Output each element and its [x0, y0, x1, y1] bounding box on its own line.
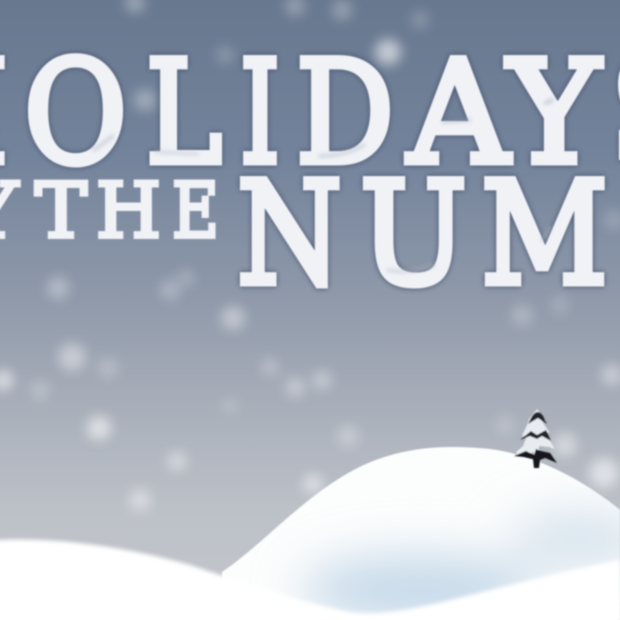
- line 1: HOLIDAYS: D: [296, 31, 394, 196]
- title shadow: L: [146, 31, 222, 196]
- back snow hill: [222, 447, 620, 620]
- icon: snowy pine tree: [514, 409, 557, 468]
- line 1: HOLIDAYS: I: [240, 31, 280, 196]
- line 1: HOLIDAYS: L: [146, 31, 222, 196]
- line 2: BY THE: H: [96, 166, 161, 255]
- line 1: HOLIDAYS: [0, 31, 620, 196]
- line 2: BY THE: E: [172, 166, 219, 255]
- title shadow: D: [296, 31, 394, 196]
- title shadow: Y: [506, 31, 601, 196]
- title shadow: A: [407, 31, 510, 196]
- line 1: HOLIDAYS: Y: [506, 31, 601, 196]
- title shadow: N: [237, 152, 342, 317]
- line 3: NUMBERS: U: [360, 152, 467, 317]
- soft shading on letters: [94, 100, 552, 272]
- line 1: HOLIDAYS: O: [24, 31, 127, 196]
- title shadow: I: [240, 31, 280, 196]
- title shadow: U: [360, 152, 467, 317]
- line 2: BY THE: T: [35, 166, 87, 255]
- hill blue shading: [300, 512, 620, 620]
- line 1: HOLIDAYS: A: [407, 31, 510, 196]
- line 3: NUMBERS: N: [237, 152, 342, 317]
- title: HOLIDAYS BY THE NUMBERS: [0, 31, 620, 317]
- line 2: BY THE: [0, 166, 219, 255]
- line 3: NUMBERS: [237, 152, 608, 317]
- title shadow: O: [24, 31, 127, 196]
- front snow drifts: [0, 540, 620, 620]
- title shadow: [0, 31, 620, 317]
- hill body: [222, 447, 620, 620]
